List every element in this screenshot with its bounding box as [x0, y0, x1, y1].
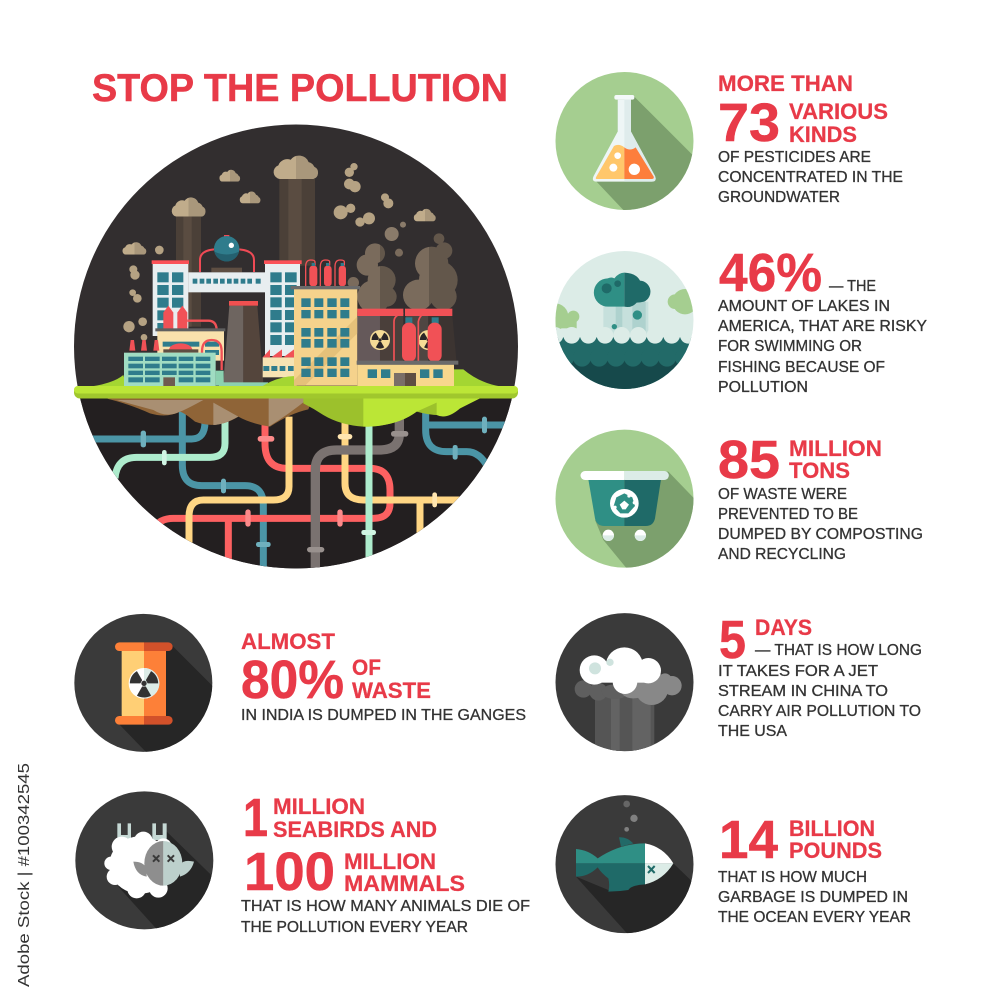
stat: 5 days: CARRY AIR POLLUTION TO [718, 703, 921, 720]
grass platform [74, 386, 518, 398]
white building right [264, 260, 302, 356]
stat: 5 days [718, 610, 922, 740]
stat: 46 percent of lakes: 46% [719, 243, 822, 303]
stat: 46 percent of lakes [718, 243, 927, 396]
stat: 80 percent of waste: OF [352, 655, 381, 680]
stat: 14 billion pounds: 14 [719, 810, 778, 870]
stat: 14 billion pounds [718, 810, 911, 926]
stat: 46 percent of lakes: AMOUNT OF LAKES IN [718, 298, 890, 315]
stat: seabirds and mammals: 100 [244, 842, 335, 902]
yellow building [291, 286, 360, 386]
icon: radioactive barrel [74, 614, 212, 752]
stat: 46 percent of lakes: FOR SWIMMING OR [718, 338, 862, 355]
stat: 85 million tons: OF WASTE WERE [718, 486, 847, 503]
stat: 46 percent of lakes: — THE [829, 278, 876, 295]
soil and hanging grass [103, 397, 483, 427]
stat: seabirds and mammals [241, 788, 530, 936]
underground pipes [83, 397, 513, 573]
title: STOP THE POLLUTION [92, 67, 508, 110]
main illustration: factory island in a dark circle [70, 124, 522, 575]
icon: smog cloud [555, 613, 693, 753]
stat: 85 million tons: MILLION [789, 436, 882, 461]
stat: seabirds and mammals: MAMMALS [344, 871, 465, 896]
sphere tank and bridge [188, 235, 265, 292]
smoke columns [176, 179, 315, 327]
stat: 46 percent of lakes: FISHING BECAUSE OF [718, 359, 885, 376]
stat: seabirds and mammals: 1 [243, 788, 268, 848]
dark plumes [348, 222, 458, 313]
mint building [124, 340, 224, 386]
stat: seabirds and mammals: THAT IS HOW MANY ANIMALS DIE OF [241, 898, 530, 915]
stat: seabirds and mammals: MILLION [344, 849, 436, 874]
stat: 85 million tons: DUMPED BY COMPOSTING [718, 526, 923, 543]
stat: 14 billion pounds: POUNDS [789, 838, 882, 863]
stat: 85 million tons: PREVENTED TO BE [718, 506, 858, 523]
red chimneys [163, 306, 217, 330]
stat: 73 kinds of pesticides [718, 71, 903, 206]
cooling tower [219, 301, 268, 386]
stat: 5 days: THE USA [718, 723, 787, 740]
icon: recycling bin [556, 430, 694, 568]
stat: 80 percent of waste: ALMOST [241, 629, 336, 654]
stat: 85 million tons: 85 [718, 430, 780, 490]
stat: seabirds and mammals: SEABIRDS AND [273, 817, 437, 842]
hills [90, 369, 502, 387]
tan factory [155, 328, 225, 361]
smoke puffs [123, 163, 393, 341]
stat: 73 kinds of pesticides: MORE THAN [718, 71, 853, 96]
stat: 46 percent of lakes: AMERICA, THAT ARE RISKY [718, 318, 927, 335]
nuclear cooling towers [357, 309, 457, 363]
stat: 80 percent of waste: IN INDIA IS DUMPED IN THE GANGES [241, 707, 526, 724]
stat: 73 kinds of pesticides: GROUNDWATER [718, 189, 840, 206]
icon: dead sheep [75, 791, 214, 930]
stock credit: Adobe Stock | #100342545 [16, 763, 33, 987]
stat: 14 billion pounds: GARBAGE IS DUMPED IN [718, 889, 908, 906]
icon: flask [556, 72, 694, 210]
stat: 73 kinds of pesticides: 73 [718, 93, 780, 153]
stat: 85 million tons: AND RECYCLING [718, 546, 846, 563]
stat: seabirds and mammals: THE POLLUTION EVERY YEAR [241, 919, 468, 936]
stat: 5 days: DAYS [755, 615, 812, 640]
stat: 14 billion pounds: BILLION [789, 816, 875, 841]
red tanks on roof [306, 260, 346, 286]
stat: seabirds and mammals: MILLION [273, 794, 365, 819]
stat: 80 percent of waste [241, 629, 526, 724]
sawtooth factory [263, 349, 294, 377]
stat: 14 billion pounds: THE OCEAN EVERY YEAR [718, 909, 911, 926]
stat: 5 days: IT TAKES FOR A JET [718, 663, 878, 680]
stat: 73 kinds of pesticides: VARIOUS [789, 99, 888, 124]
stat: 5 days: — THAT IS HOW LONG [755, 642, 922, 659]
clouds [123, 156, 436, 255]
stat: 80 percent of waste: 80% [241, 650, 344, 710]
stat: 80 percent of waste: WASTE [352, 678, 431, 703]
icon: polluted lake [556, 251, 694, 389]
stat: 85 million tons: TONS [789, 458, 850, 483]
stat: 5 days: 5 [719, 610, 746, 670]
stat: 73 kinds of pesticides: KINDS [789, 122, 857, 147]
stat: 73 kinds of pesticides: CONCENTRATED IN THE [718, 169, 903, 186]
icon: dead fish [556, 795, 694, 934]
stat: 46 percent of lakes: POLLUTION [718, 379, 808, 396]
white building left [152, 260, 189, 336]
stat: 14 billion pounds: THAT IS HOW MUCH [718, 869, 867, 886]
low building [357, 361, 458, 386]
factories, smoke and clouds [90, 156, 502, 387]
stat: 73 kinds of pesticides: OF PESTICIDES ARE [718, 149, 871, 166]
stat: 85 million tons [718, 430, 923, 563]
stat: 5 days: STREAM IN CHINA TO [718, 683, 888, 700]
